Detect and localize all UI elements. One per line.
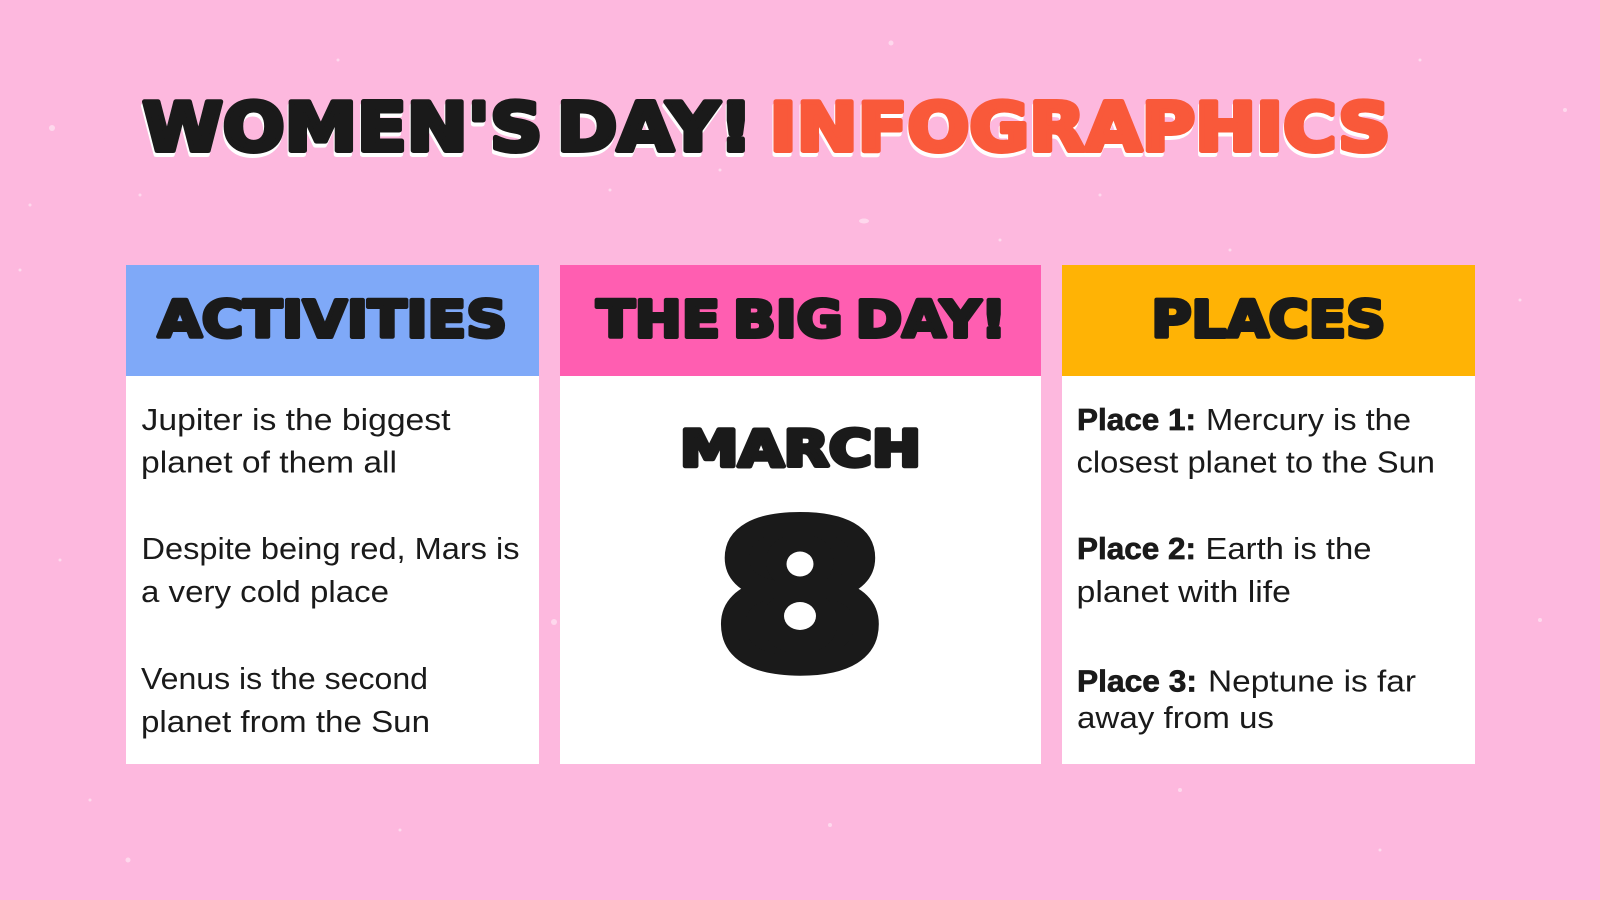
text block: place 2: Earth is the <box>1206 531 1372 566</box>
panel: places <box>1062 265 1475 764</box>
heading: activities: ACTIVITIES <box>158 291 507 350</box>
text block: place 1: Place 1: <box>1077 402 1196 437</box>
text block: Mars <box>141 531 520 609</box>
date: month: MARCH <box>680 420 921 478</box>
text block: Venus <box>141 661 430 739</box>
text block: Venus: Venus is the second <box>141 661 428 696</box>
title <box>142 88 1390 166</box>
text block: Mars: Despite being red, Mars is <box>142 531 520 566</box>
text block: Jupiter: Jupiter is the biggest <box>142 402 451 437</box>
text block: Mars: a very cold place <box>141 574 389 609</box>
text block: Jupiter: planet of them all <box>141 444 397 480</box>
header band: activities <box>126 265 539 376</box>
heading: places: PLACES <box>1152 291 1386 350</box>
text block: place 1: closest planet to the Sun <box>1076 444 1435 480</box>
text block: Jupiter <box>141 402 451 480</box>
text block: place 3: away from us <box>1077 700 1274 735</box>
date: day number: 8 <box>719 487 881 708</box>
text block: place 2 <box>1076 531 1372 609</box>
title: Women's Day!: WOMEN'S DAY! <box>142 88 752 166</box>
text block: place 2: Place 2: <box>1077 531 1196 566</box>
text block: place 3: Neptune is far <box>1208 664 1416 698</box>
text block: place 1 <box>1076 402 1435 480</box>
heading: the big day: THE BIG DAY! <box>596 291 1006 350</box>
panel: activities <box>126 265 539 764</box>
panel: the big day <box>560 265 1041 764</box>
header band: places <box>1062 265 1475 376</box>
text block: place 2: planet with life <box>1076 574 1291 609</box>
title: Infographics: INFOGRAPHICS <box>770 88 1390 166</box>
text block: Venus: planet from the Sun <box>141 704 430 739</box>
header band: the big day <box>560 265 1041 376</box>
text block: place 1: Mercury is the <box>1206 402 1411 437</box>
text block: place 3: Place 3: <box>1077 664 1197 698</box>
text block: place 3 <box>1077 664 1416 735</box>
